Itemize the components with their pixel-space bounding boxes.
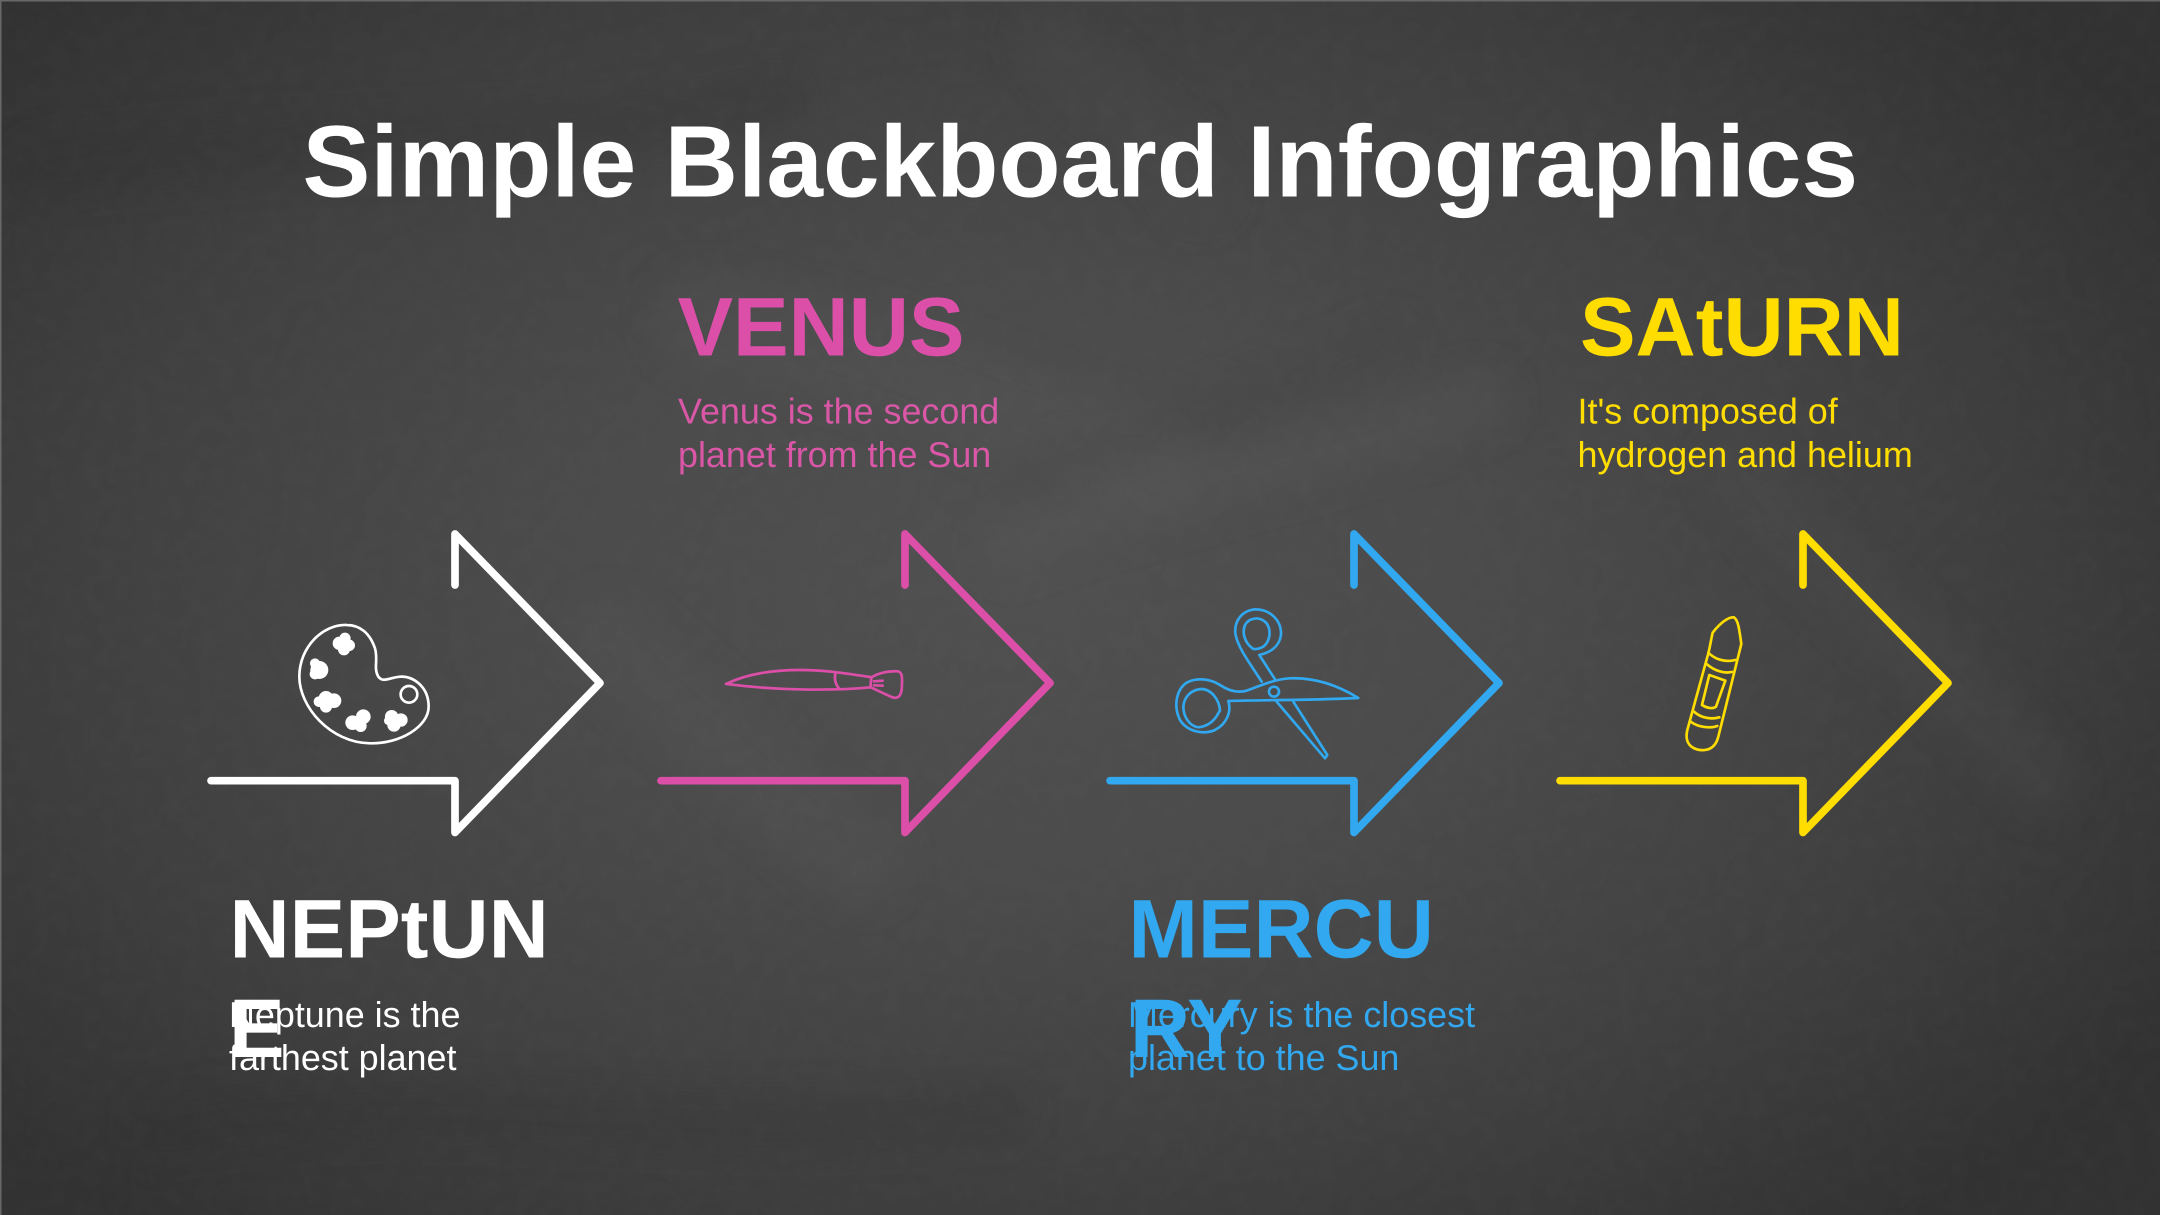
text: Venus description: planet from the Sun (678, 435, 991, 475)
text: Saturn description: hydrogen and helium (1578, 435, 1913, 475)
panel: Neptune step (211, 534, 600, 1078)
icon: paint palette (299, 625, 429, 743)
label: Mercury heading: RY (1130, 982, 1243, 1075)
text: Mercury description: Mercury is the closest (1128, 995, 1475, 1035)
label: Mercury heading: MERCU (1128, 882, 1434, 976)
icon: scissors (1176, 609, 1358, 758)
panel: Mercury step (1110, 534, 1499, 1078)
text: Neptune description: Neptune is the (229, 995, 460, 1035)
text: Neptune description (229, 995, 460, 1078)
panel: Saturn step (1560, 280, 1948, 832)
label: Saturn heading: SAtURN (1580, 280, 1904, 374)
panel: Venus step (661, 280, 1050, 832)
title: Simple Blackboard Infographics (302, 104, 1858, 218)
arrow: Mercury (1110, 534, 1499, 832)
arrow: Saturn (1560, 534, 1948, 832)
label: Mercury heading (1128, 882, 1434, 1075)
text: Saturn description: It's composed of (1578, 392, 1839, 432)
text: Neptune description: farthest planet (229, 1038, 456, 1078)
label: Neptune heading (229, 882, 549, 1075)
label: Neptune heading: E (229, 982, 285, 1075)
label: Neptune heading: NEPtUN (230, 882, 549, 976)
icon: paint brush (726, 670, 902, 698)
text: Venus description: Venus is the second (678, 392, 999, 432)
arrow: Venus (661, 534, 1050, 832)
text: Mercury description: planet to the Sun (1128, 1038, 1399, 1078)
icon: crayon (1687, 617, 1741, 750)
text: Mercury description (1128, 995, 1475, 1078)
arrow: Neptune (211, 534, 600, 832)
label: Venus heading: VENUS (678, 280, 964, 374)
text: Saturn description (1578, 392, 1913, 475)
text: Venus description (678, 392, 999, 475)
